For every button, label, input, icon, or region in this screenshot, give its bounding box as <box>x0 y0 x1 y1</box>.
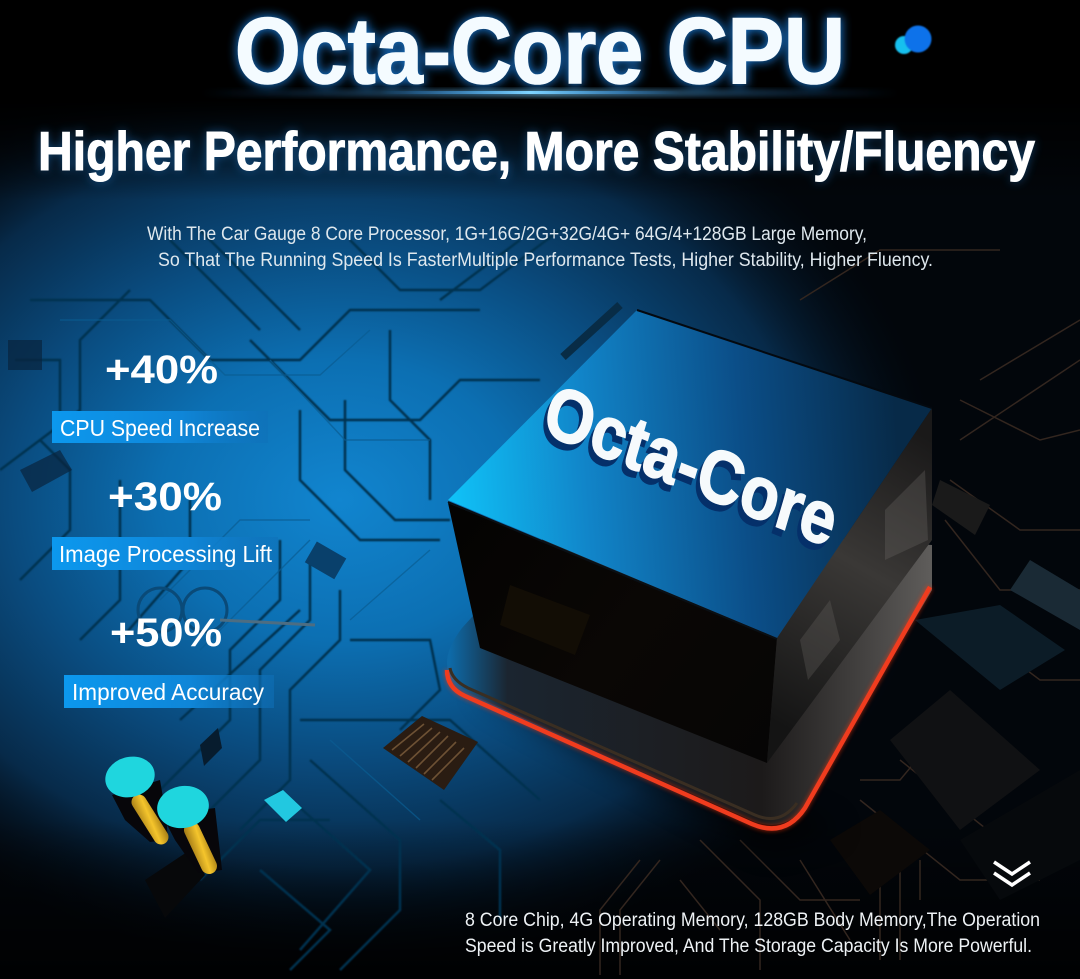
right side dark circuitry <box>600 250 1080 975</box>
cube front face <box>448 503 777 763</box>
cube top face <box>448 310 932 638</box>
stat: +40% CPU Speed Increase <box>52 348 268 443</box>
stat: +30% Image Processing Lift: Image Processing Lift <box>59 541 273 567</box>
description text: With The Car Gauge 8 Core Processor, 1G+16G/2G+32G/4G+ 64G/4+128GB Large Memory, <box>147 224 867 245</box>
stat: +40% CPU Speed Increase: +40% <box>105 348 218 392</box>
bottom caption: 8 Core Chip, 4G Operating Memory, 128GB Body Memory,The Operation <box>465 910 1040 931</box>
capacitors <box>101 751 222 873</box>
chip base plate <box>447 520 932 825</box>
title: Octa-Core CPU: Octa-Core CPU <box>235 0 845 103</box>
title: Octa-Core CPU: Octa-Core CPU <box>235 0 845 103</box>
circuit chips <box>8 305 620 918</box>
cube right face <box>767 408 932 763</box>
stat: +40% CPU Speed Increase: CPU Speed Increase <box>60 415 260 441</box>
chip label: Octa-Core <box>532 374 844 569</box>
red glow edge <box>447 587 930 828</box>
description text <box>147 224 933 271</box>
central chip: Octa-Core cube <box>447 310 932 850</box>
chip shadow <box>470 690 840 850</box>
blue circuit traces <box>0 230 560 970</box>
glowing divider <box>200 89 900 97</box>
stat: +50% Improved Accuracy: Improved Accuracy <box>72 679 264 705</box>
description text: So That The Running Speed Is FasterMultiple Performance Tests, Higher Stability, Higher Fluency. <box>158 250 933 271</box>
icon: blue dots <box>895 26 932 54</box>
stat: +30% Image Processing Lift <box>52 475 278 570</box>
bottom caption <box>465 910 1040 957</box>
stat: +50% Improved Accuracy <box>64 611 274 708</box>
stat: +50% Improved Accuracy: +50% <box>110 611 222 655</box>
bottom caption: Speed is Greatly Improved, And The Storage Capacity Is More Powerful. <box>465 936 1032 957</box>
chip label: Octa-Core <box>536 368 847 563</box>
stat: +30% Image Processing Lift: +30% <box>108 475 222 519</box>
icon: double chevron <box>994 862 1030 885</box>
